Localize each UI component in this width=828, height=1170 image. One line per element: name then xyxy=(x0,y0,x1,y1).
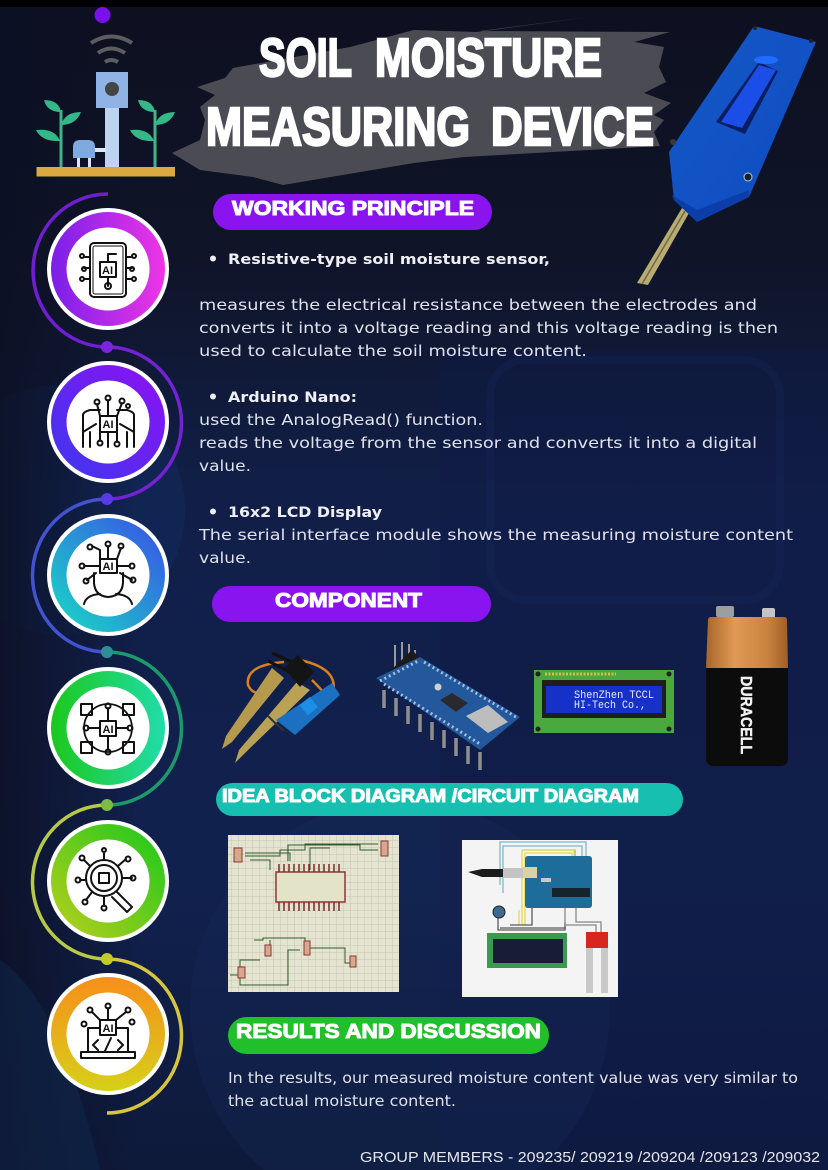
top sensor illustration xyxy=(36,7,175,176)
text block: working principle: reads the voltage from the sensor and converts it into a digital xyxy=(199,434,757,452)
text block: working principle: Resistive-type soil moisture sensor, xyxy=(228,252,550,268)
connector arcs xyxy=(32,194,182,1113)
image: circuit diagram xyxy=(462,840,618,997)
text block: results: the actual moisture content. xyxy=(228,1092,456,1110)
probe xyxy=(637,208,689,285)
casing xyxy=(669,26,816,222)
circle icon: hands with chip xyxy=(47,361,169,483)
image: battery xyxy=(706,606,788,766)
title: SOIL xyxy=(259,28,352,88)
title xyxy=(206,28,654,157)
footer: group members: GROUP MEMBERS - 209235/ 209219 /209204 /209123 /209032 xyxy=(360,1149,820,1166)
image: LCD display: HI-Tech Co., xyxy=(574,700,646,712)
circle icon: magnifier chip xyxy=(47,820,169,942)
circle icon: chip board xyxy=(47,208,169,330)
text block: working principle: used to calculate the soil moisture content. xyxy=(199,342,587,360)
text block: working principle: value. xyxy=(199,457,251,475)
text block: working principle: The serial interface module shows the measuring moisture content xyxy=(198,526,793,544)
image: battery: DURACELL xyxy=(737,676,754,754)
text block: working principle: used the AnalogRead() function. xyxy=(199,411,483,429)
circle icon: laptop code xyxy=(47,973,169,1095)
image: schematic diagram xyxy=(228,835,399,992)
circle icon: cubes network xyxy=(47,667,169,789)
circle icon: AI head xyxy=(47,514,169,636)
text block: working principle: 16x2 LCD Display xyxy=(228,505,383,521)
heading: results and discussion: RESULTS AND DISCUSSION xyxy=(236,1021,541,1043)
title brush stroke xyxy=(172,17,671,185)
image: LCD display: ShenZhen TCCL xyxy=(574,690,654,702)
icon: plants xyxy=(36,100,175,167)
text block: working principle: Arduino Nano: xyxy=(228,390,357,406)
image: LCD display xyxy=(534,670,674,733)
title: MOISTURE xyxy=(375,28,602,88)
text block: results xyxy=(228,1069,798,1110)
circle icon: chip board: AI xyxy=(102,265,113,277)
heading: block diagram xyxy=(216,783,683,816)
circle icon: laptop code: AI xyxy=(102,1023,114,1035)
text block: working principle: converts it into a voltage reading and this voltage reading is then xyxy=(199,319,778,337)
title: DEVICE xyxy=(491,97,654,157)
image: arduino nano xyxy=(376,642,520,770)
image: soil moisture sensor xyxy=(222,653,340,763)
circle icon: cubes network: AI xyxy=(102,724,114,736)
device photo xyxy=(637,26,816,285)
heading: results and discussion xyxy=(228,1017,549,1054)
heading: component xyxy=(212,586,491,622)
screen xyxy=(716,62,778,134)
connector nodes xyxy=(101,341,113,965)
heading: working principle xyxy=(213,194,492,230)
heading: working principle: WORKING PRINCIPLE xyxy=(232,198,474,220)
icon: soil strip xyxy=(36,167,175,176)
icon: purple dot xyxy=(94,7,110,23)
text block: working principle: value. xyxy=(199,549,251,567)
text block: results: In the results, our measured moisture content value was very similar to xyxy=(228,1069,798,1087)
heading: block diagram: IDEA BLOCK DIAGRAM /CIRCUIT DIAGRAM xyxy=(222,786,639,806)
text block: working principle: measures the electrical resistance between the electrodes and xyxy=(199,296,757,314)
circle icon: AI head: AI xyxy=(102,561,114,573)
circle icon: hands with chip: AI xyxy=(102,419,114,431)
icon: wifi waves xyxy=(91,36,132,62)
text block: working principle xyxy=(198,252,793,567)
heading: component: COMPONENT xyxy=(275,590,422,612)
title: MEASURING xyxy=(206,97,470,157)
icon: station pole and box xyxy=(73,72,128,167)
